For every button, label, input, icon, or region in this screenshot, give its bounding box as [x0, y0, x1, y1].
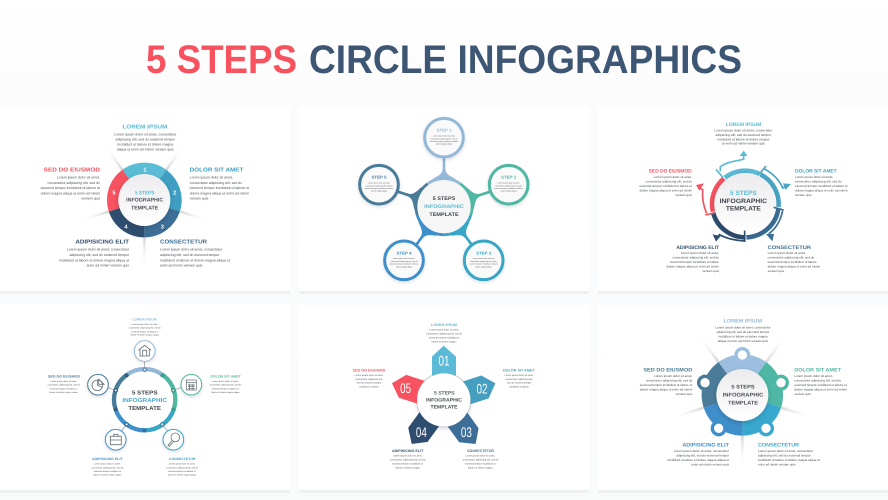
- text block: lorem ipsum: aliqua ut enim ad minim veniam quis: [117, 148, 174, 152]
- heading: sed do eiusmod: SED DO EIUSMOD: [48, 375, 80, 379]
- satellite: step 2: STEP 2: [501, 175, 516, 180]
- centre label: TEMPLATE: [430, 405, 458, 410]
- satellite: step 5: eiusmod tempor incididunt ut labore: [365, 188, 393, 190]
- text block: adipisicing elit: veniam quis: [702, 269, 719, 273]
- text block: consectetur: veniam quis: [768, 269, 784, 273]
- centre label: 5 STEPS: [730, 190, 757, 197]
- text block: dolor sit amet: veniam quis: [795, 193, 812, 197]
- centre disk: [716, 369, 768, 421]
- pentagon tabs: [388, 346, 499, 451]
- satellite: step 1: eiusmod tempor incididunt ut labore: [430, 141, 458, 143]
- centre label: [424, 196, 464, 217]
- centre label: 5 STEPS: [731, 384, 755, 390]
- text block: sed do eiusmod: veniam quis: [676, 392, 692, 396]
- text block: sed do eiusmod: sed do eiusmod tempor: [357, 382, 381, 384]
- heading: dolor sit amet: DOLOR SIT AMET: [795, 168, 837, 174]
- satellite: step 4: Lorem ipsum dolor sit amet,: [393, 258, 415, 260]
- heading: adipisicing elit: ADIPISICING ELIT: [676, 245, 719, 250]
- text block: consectetur: incididunt ut labore et dolore magna aliqua ut: [160, 258, 230, 262]
- heading: consectetur: CONSECTETUR: [758, 442, 799, 448]
- ring nodes: [114, 368, 175, 432]
- text block: lorem ipsum: adipiscing elit, sed do eiusmod tempor: [716, 133, 771, 137]
- text block: consectetur: labore et dolore magna: [468, 466, 493, 469]
- text block: lorem ipsum: aliqua ut enim ad minim veniam quis: [718, 339, 768, 343]
- text block: consectetur: eiusmod tempor incididunt ut labore: [768, 260, 817, 264]
- text block: adipisicing elit: eiusmod tempor incididunt ut: [392, 462, 423, 465]
- satellite: step 5: [360, 165, 398, 204]
- text block: consectetur: Lorem ipsum dolor sit amet, consectetur: [758, 449, 813, 453]
- ring: [102, 357, 188, 443]
- centre label: TEMPLATE: [429, 212, 459, 217]
- text block: adipisicing elit: enim ad minim veniam quis: [87, 263, 129, 267]
- centre label: 5 STEPS: [434, 390, 455, 396]
- text block: dolor sit amet: eiusmod tempor incididunt ut labore et: [795, 184, 848, 188]
- text block: consectetur: incididunt ut labore et dolore magna aliqua ut: [758, 458, 820, 462]
- satellite: step 4: dolore magna aliqua: [396, 266, 412, 268]
- text block: sed do eiusmod: dolore magna aliqua ut enim ad minim: [640, 388, 692, 391]
- tab numbers: 01: [438, 353, 449, 369]
- centre ring: [417, 373, 471, 427]
- text block: lorem ipsum: Lorem ipsum dolor sit amet, consectetur: [715, 326, 771, 329]
- centre label: INFOGRAPHIC: [424, 204, 464, 209]
- text block: consectetur: consectetur adipiscing elit, sed do: [462, 458, 498, 461]
- heading: dolor sit amet: DOLOR SIT AMET: [210, 375, 241, 379]
- panel: pentagon arrows: [353, 323, 535, 469]
- segment numbers: 3: [161, 224, 164, 230]
- panel: satellite circles: [360, 118, 528, 280]
- panel: segmented wheel with nubs: [640, 318, 847, 470]
- centre label: INFOGRAPHIC: [122, 397, 167, 403]
- heading: sed do eiusmod: SED DO EIUSMOD: [353, 368, 385, 372]
- title: CIRCLE INFOGRAPHICS: [309, 38, 742, 82]
- text block: dolor sit amet: consectetur adipiscing elit, sed do: [190, 181, 242, 185]
- text block: adipisicing elit: consectetur adipiscing elit, sed do: [390, 458, 426, 461]
- text block: dolor sit amet: veniam quis: [190, 197, 208, 201]
- radial rays: [671, 334, 814, 470]
- ring segments: [101, 157, 188, 243]
- heading: consectetur: CONSECTETUR: [169, 457, 196, 461]
- text block: lorem ipsum: Lorem ipsum dolor sit amet,: [132, 323, 158, 326]
- heading: consectetur: CONSECTETUR: [160, 239, 207, 245]
- text block: sed do eiusmod: consectetur adipiscing elit,: [355, 378, 383, 381]
- satellite: step 3: consectetur adipiscing elit, sed do: [470, 261, 497, 263]
- text block: lorem ipsum: adipiscing elit, sed do eiusmod tempor: [717, 330, 769, 334]
- text block: sed do eiusmod: consectetur adipiscing elit, sed do: [48, 384, 80, 386]
- satellite: step 3: dolore magna aliqua: [476, 266, 492, 268]
- satellite: step 5: dolore magna aliqua: [371, 190, 387, 192]
- wheel segments: [700, 353, 785, 437]
- arrow: lower right: [766, 207, 784, 241]
- satellite: step 2: consectetur adipiscing elit, sed do: [495, 185, 522, 187]
- text block: lorem ipsum: incididunt ut labore et dolore magna: [717, 138, 769, 141]
- text block: dolor sit amet: dolore magna aliqua ut enim ad minim: [794, 388, 847, 391]
- arrow: left: [696, 183, 715, 215]
- text block: consectetur: consectetur adipiscing elit, sed do: [166, 467, 198, 469]
- satellite: step 1: [425, 118, 463, 157]
- text block: dolor sit amet: dolore magna aliqua ut enim ad minim: [795, 189, 848, 192]
- text block: sed do eiusmod: veniam quis: [81, 197, 100, 201]
- text block: lorem ipsum: Lorem ipsum dolor sit amet,: [429, 328, 459, 331]
- text block: consectetur: Lorem ipsum dolor sit amet,: [466, 454, 495, 457]
- text block: lorem ipsum: labore et dolore magna: [432, 340, 456, 343]
- satellite: step 2: Lorem ipsum dolor sit amet,: [498, 182, 520, 184]
- icon: pie chart: [88, 374, 108, 395]
- panel: arrow ring: [639, 122, 848, 273]
- panel: numbered ring: [41, 123, 249, 268]
- connectors: [393, 157, 495, 254]
- text block: sed do eiusmod: veniam quis: [675, 193, 692, 197]
- centre disk: [118, 174, 170, 226]
- text block: dolor sit amet: labore et dolore magna aliqua: [211, 391, 240, 394]
- text block: adipisicing elit: adipiscing elit, sed do eiusmod tempor: [69, 253, 129, 257]
- panel: icon ring: [48, 318, 241, 476]
- satellite: step 3: eiusmod tempor incididunt ut labore: [469, 263, 498, 265]
- text block: dolor sit amet: Lorem ipsum dolor sit amet,: [212, 380, 239, 383]
- tab numbers: 04: [416, 424, 427, 440]
- text block: consectetur: enim ad minim veniam quis: [160, 263, 202, 267]
- centre label: 5 STEPS: [135, 190, 154, 196]
- heading: lorem ipsum: LOREM IPSUM: [122, 123, 167, 130]
- icon: briefcase: [105, 429, 126, 450]
- satellite: step 5: STEP 5: [371, 175, 387, 180]
- text block: sed do eiusmod: consectetur adipiscing elit, sed do: [645, 180, 692, 183]
- text block: sed do eiusmod: Lorem ipsum dolor sit amet,: [654, 175, 692, 179]
- text block: dolor sit amet: Lorem ipsum dolor sit amet,: [795, 175, 833, 179]
- centre label: [723, 384, 763, 406]
- heading: dolor sit amet: DOLOR SIT AMET: [794, 367, 841, 373]
- text block: lorem ipsum: eiusmod tempor incididunt ut: [429, 336, 459, 339]
- text block: sed do eiusmod: consectetur adipiscing elit, sed do: [47, 181, 100, 185]
- ring segments: [699, 157, 792, 251]
- segment numbers: 5: [112, 190, 116, 196]
- text block: sed do eiusmod: labore et dolore magna aliqua: [50, 391, 78, 394]
- text block: adipisicing elit: dolore magna aliqua ut enim ad minim: [666, 265, 719, 268]
- satellite: step 4: STEP 4: [396, 251, 412, 255]
- heading: lorem ipsum: LOREM IPSUM: [724, 318, 762, 324]
- satellite: step 1: STEP 1: [436, 128, 452, 133]
- heading: consectetur: CONSECTETUR: [467, 449, 494, 453]
- text block: dolor sit amet: Lorem ipsum dolor sit amet,: [794, 374, 833, 378]
- connector stubs: [107, 362, 182, 431]
- icon: magnifier: [163, 429, 184, 450]
- text block: sed do eiusmod: Lorem ipsum dolor sit amet,: [654, 374, 692, 378]
- arrow: top: [716, 151, 748, 177]
- centre label: 5 STEPS: [433, 196, 455, 201]
- text block: dolor sit amet: veniam quis: [794, 392, 811, 396]
- text block: dolor sit amet: consectetur adipiscing elit, sed do: [795, 180, 842, 183]
- centre label: [126, 190, 163, 211]
- text block: lorem ipsum: incididunt ut labore et dolore magna: [118, 142, 173, 146]
- text block: lorem ipsum: adipiscing elit, sed do eiusmod tempor: [116, 137, 175, 141]
- text block: adipisicing elit: adipiscing elit, sed do eiusmod tempor: [676, 454, 729, 457]
- text block: consectetur: Lorem ipsum dolor sit amet,: [768, 251, 806, 255]
- text block: dolor sit amet: incididunt ut labore: [509, 386, 529, 388]
- text block: consectetur: Lorem ipsum dolor sit amet, consectetur: [160, 248, 222, 252]
- centre label: TEMPLATE: [131, 205, 158, 211]
- centre label: TEMPLATE: [128, 405, 161, 411]
- arrow: right: [759, 166, 791, 190]
- heading: sed do eiusmod: SED DO EIUSMOD: [44, 167, 100, 173]
- text block: dolor sit amet: eiusmod tempor incididunt ut: [212, 388, 239, 390]
- text block: adipisicing elit: Lorem ipsum dolor sit amet,: [94, 463, 121, 465]
- satellite: step 2: eiusmod tempor incididunt ut labore: [494, 188, 523, 190]
- title: 5 STEPS: [146, 38, 297, 82]
- text block: adipisicing elit: enim ad minim veniam quis: [691, 463, 729, 466]
- text block: adipisicing elit: incididunt ut labore et dolore magna aliqua ut: [59, 258, 129, 262]
- heading: lorem ipsum: LOREM IPSUM: [726, 122, 761, 127]
- satellite: step 1: Lorem ipsum dolor sit amet,: [433, 135, 455, 137]
- centre label: INFOGRAPHIC: [723, 392, 763, 398]
- satellite: step 5: Lorem ipsum dolor sit amet,: [368, 182, 390, 184]
- text block: dolor sit amet: eiusmod tempor incididunt ut labore et: [794, 383, 847, 387]
- satellite: step 3: STEP 3: [476, 251, 491, 255]
- heading: consectetur: CONSECTETUR: [768, 245, 811, 250]
- text block: dolor sit amet: consectetur adipiscing elit, sed do: [794, 379, 841, 382]
- text block: adipisicing elit: eiusmod tempor incididunt ut labore: [670, 260, 719, 264]
- text block: consectetur: Lorem ipsum dolor sit amet,: [169, 463, 195, 465]
- text block: sed do eiusmod: incididunt ut labore: [359, 386, 379, 388]
- tab numbers: 02: [476, 381, 487, 396]
- satellite: step 2: [489, 165, 528, 204]
- heading: adipisicing elit: ADIPISICING ELIT: [682, 442, 729, 448]
- text block: consectetur: eiusmod tempor incididunt ut: [465, 462, 496, 465]
- text block: lorem ipsum: labore et dolore magna aliqua: [131, 334, 159, 336]
- text block: adipisicing elit: labore et dolore magna aliqua: [93, 474, 122, 476]
- satellite: step 4: consectetur adipiscing elit, sed do: [391, 261, 417, 263]
- segment numbers: 4: [124, 224, 128, 230]
- text block: adipisicing elit: eiusmod tempor incididunt ut: [94, 470, 121, 473]
- tab numbers: [400, 353, 487, 440]
- text block: dolor sit amet: eiusmod tempor incididunt ut labore et: [190, 186, 249, 190]
- text block: dolor sit amet: consectetur adipiscing elit,: [505, 378, 533, 381]
- text block: sed do eiusmod: consectetur adipiscing elit, sed do: [646, 379, 692, 382]
- centre label: [720, 190, 767, 212]
- centre label: [426, 390, 462, 410]
- text block: sed do eiusmod: Lorem ipsum dolor sit amet,: [355, 374, 383, 377]
- centre disk: [417, 180, 471, 233]
- text block: adipisicing elit: consectetur adipiscing elit, sed do: [91, 467, 123, 469]
- text block: adipisicing elit: Lorem ipsum dolor sit amet,: [393, 454, 422, 457]
- text block: sed do eiusmod: eiusmod tempor incididunt ut labore et: [639, 184, 692, 188]
- text block: sed do eiusmod: dolore magna aliqua ut enim ad minim: [639, 189, 692, 192]
- centre ring: [405, 168, 483, 246]
- text block: adipisicing elit: labore et dolore magna: [395, 466, 420, 469]
- text block: sed do eiusmod: dolore magna aliqua ut enim ad minim: [41, 191, 100, 195]
- text block: consectetur: adipiscing elit, sed do eiusmod tempor: [758, 454, 811, 457]
- icon: calendar: [181, 374, 202, 395]
- heading: adipisicing elit: ADIPISICING ELIT: [75, 239, 129, 245]
- segment numbers: 2: [173, 190, 176, 196]
- text block: sed do eiusmod: Lorem ipsum dolor sit amet,: [57, 176, 100, 180]
- heading: dolor sit amet: DOLOR SIT AMET: [190, 167, 244, 173]
- centre label: INFOGRAPHIC: [720, 198, 767, 205]
- centre label: [122, 389, 167, 411]
- text block: lorem ipsum: incididunt ut labore et dolore magna: [718, 335, 768, 338]
- satellite: step 3: [464, 241, 503, 280]
- text block: dolor sit amet: sed do eiusmod tempor: [507, 382, 531, 384]
- text block: dolor sit amet: Lorem ipsum dolor sit amet,: [190, 176, 233, 180]
- text block: adipisicing elit: incididunt ut labore et dolore magna aliqua ut: [667, 458, 729, 462]
- satellite: step 1: consectetur adipiscing elit, sed do: [431, 138, 457, 140]
- text block: dolor sit amet: consectetur adipiscing elit, sed do: [209, 384, 241, 386]
- tab numbers: 03: [461, 424, 472, 440]
- text block: lorem ipsum: consectetur adipiscing elit, sed do: [426, 332, 462, 335]
- centre label: INFOGRAPHIC: [426, 397, 462, 403]
- satellite: step 4: [385, 241, 423, 280]
- text block: lorem ipsum: Lorem ipsum dolor sit amet, consectetur: [114, 132, 177, 136]
- text block: lorem ipsum: consectetur adipiscing elit, sed do: [129, 327, 161, 329]
- text block: adipisicing elit: Lorem ipsum dolor sit amet, consectetur: [674, 449, 729, 453]
- heading: sed do eiusmod: SED DO EIUSMOD: [643, 367, 692, 373]
- icon: building: [134, 341, 155, 361]
- heading: adipisicing elit: ADIPISICING ELIT: [392, 449, 424, 453]
- wheel nubs: [699, 349, 787, 435]
- heading: lorem ipsum: LOREM IPSUM: [431, 323, 457, 327]
- text block: lorem ipsum: ut enim ad minim veniam quis: [722, 142, 765, 146]
- centre label: TEMPLATE: [728, 400, 758, 406]
- text block: dolor sit amet: dolore magna aliqua ut enim ad minim: [190, 191, 249, 195]
- radial rays: [79, 144, 210, 268]
- text block: lorem ipsum: eiusmod tempor incididunt ut: [131, 331, 158, 333]
- tab numbers: 05: [400, 380, 411, 396]
- text block: sed do eiusmod: Lorem ipsum dolor sit amet,: [51, 380, 77, 383]
- text block: sed do eiusmod: eiusmod tempor incididunt ut labore et: [41, 186, 100, 190]
- heading: lorem ipsum: LOREM IPSUM: [132, 318, 157, 321]
- heading: sed do eiusmod: SED DO EIUSMOD: [649, 168, 692, 174]
- text block: dolor sit amet: Lorem ipsum dolor sit amet,: [505, 374, 533, 377]
- arrow: lower left: [713, 231, 745, 242]
- text block: consectetur: adipiscing elit, sed do eiusmod tempor: [160, 253, 220, 257]
- panel backgrounds: [0, 107, 888, 493]
- heading: adipisicing elit: ADIPISICING ELIT: [92, 457, 123, 461]
- centre label: 5 STEPS: [132, 389, 157, 396]
- text block: lorem ipsum: Lorem ipsum dolor sit amet, consectetur: [714, 129, 773, 133]
- satellite: step 1: dolore magna aliqua: [436, 143, 452, 145]
- centre label: INFOGRAPHIC: [126, 197, 163, 203]
- text block: sed do eiusmod: eiusmod tempor incididunt ut labore et: [640, 383, 692, 387]
- satellite: step 2: dolore magna aliqua: [501, 190, 517, 192]
- satellite: step 3: Lorem ipsum dolor sit amet,: [473, 258, 495, 260]
- text block: adipisicing elit: Lorem ipsum dolor sit amet, consectetur: [67, 248, 129, 252]
- centre label: TEMPLATE: [726, 205, 761, 212]
- satellite: step 5: consectetur adipiscing elit, sed do: [366, 185, 392, 187]
- text block: adipisicing elit: Lorem ipsum dolor sit amet,: [681, 251, 719, 255]
- text block: consectetur: enim ad minim veniam quis: [758, 463, 796, 466]
- text block: consectetur: consectetur adipiscing elit, sed do: [768, 256, 814, 259]
- text block: consectetur: eiusmod tempor incididunt ut: [168, 470, 196, 473]
- segment numbers: [112, 166, 176, 230]
- text block: consectetur: labore et dolore magna aliqua: [168, 474, 196, 476]
- title: [146, 38, 742, 82]
- text block: consectetur: dolore magna aliqua ut enim ad minim: [768, 265, 820, 268]
- satellite: step 4: eiusmod tempor incididunt ut labore: [390, 263, 418, 265]
- heading: dolor sit amet: DOLOR SIT AMET: [503, 368, 535, 372]
- text block: sed do eiusmod: eiusmod tempor incididunt ut: [50, 388, 77, 390]
- segment numbers: 1: [143, 166, 147, 173]
- centre disk: [714, 173, 776, 235]
- text block: adipisicing elit: consectetur adipiscing elit, sed do: [672, 256, 719, 259]
